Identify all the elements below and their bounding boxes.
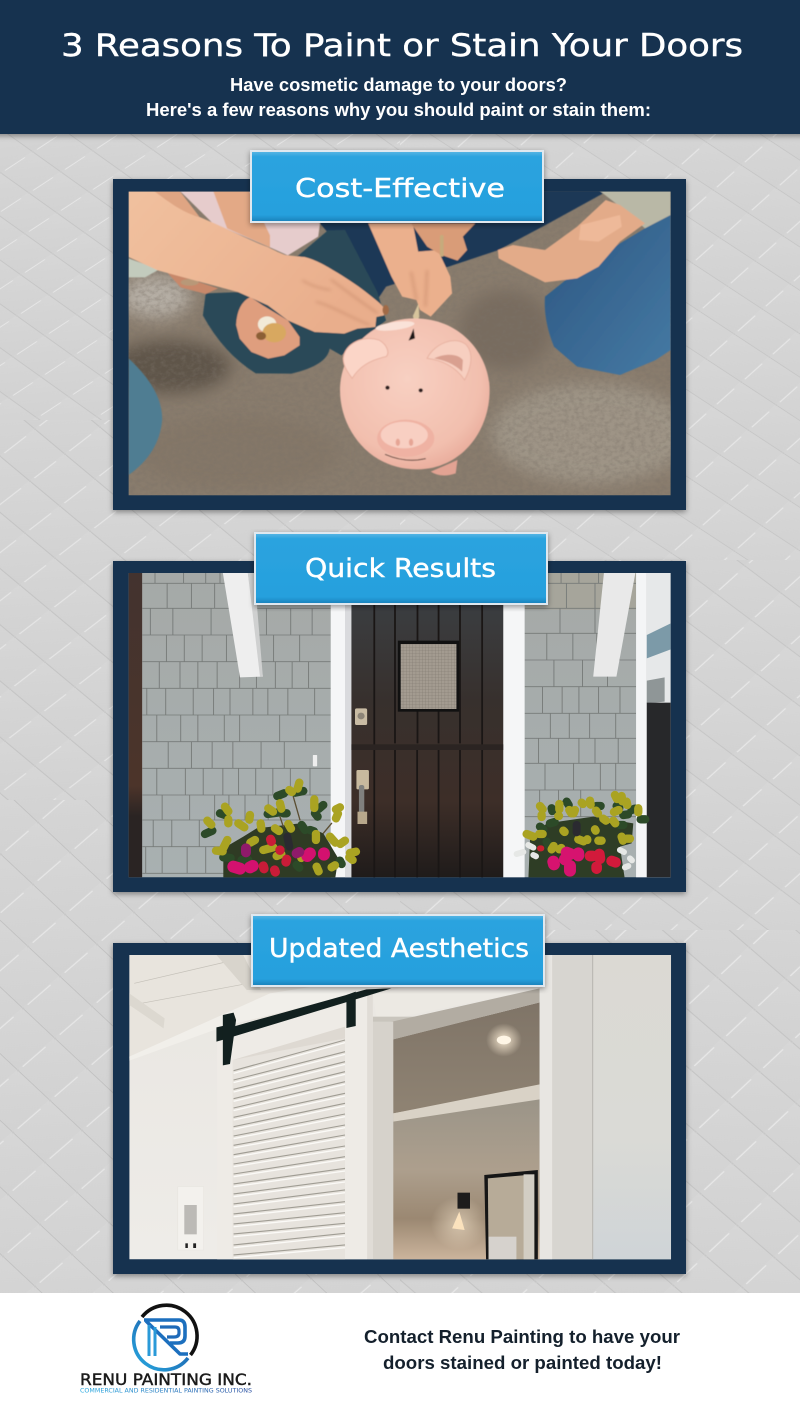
label: Quick Results: Quick Results <box>305 554 496 584</box>
flowers right <box>517 795 645 880</box>
title: 3 Reasons To Paint or Stain Your Doors <box>61 28 743 64</box>
photo: white louvered barn door <box>129 955 671 1259</box>
call to action: doors stained or painted today! <box>383 1353 662 1373</box>
label: Updated Aesthetics: Updated Aesthetics <box>269 934 529 964</box>
logo: Renu Painting Inc. <box>80 1305 252 1394</box>
logo wordmark: RENU PAINTING INC. <box>80 1370 252 1389</box>
photo: dark stained front door <box>129 573 671 880</box>
panel frame <box>113 943 686 1274</box>
intro text <box>146 75 651 120</box>
photo: hands dropping coins into piggy bank <box>109 190 691 495</box>
header banner <box>0 0 800 134</box>
intro text: Have cosmetic damage to your doors? <box>230 75 567 95</box>
call to action: Contact Renu Painting to have your <box>364 1327 680 1347</box>
label: Updated Aesthetics <box>252 915 544 986</box>
intro text: Here's a few reasons why you should paint or stain them: <box>146 100 651 120</box>
label: Quick Results <box>255 533 547 604</box>
panel frame <box>113 561 686 892</box>
footer band <box>0 1293 800 1421</box>
panel: cost-effective <box>109 151 691 510</box>
logo emblem <box>134 1305 197 1370</box>
panel: quick results <box>113 533 686 892</box>
logo tagline: COMMERCIAL AND RESIDENTIAL PAINTING SOLUTIONS <box>80 1388 252 1394</box>
panel: updated aesthetics <box>113 915 686 1274</box>
label: Cost-Effective: Cost-Effective <box>295 174 505 204</box>
flowers left <box>205 783 356 880</box>
panel frame <box>113 179 686 510</box>
call to action <box>364 1327 680 1373</box>
label: Cost-Effective <box>251 151 543 222</box>
